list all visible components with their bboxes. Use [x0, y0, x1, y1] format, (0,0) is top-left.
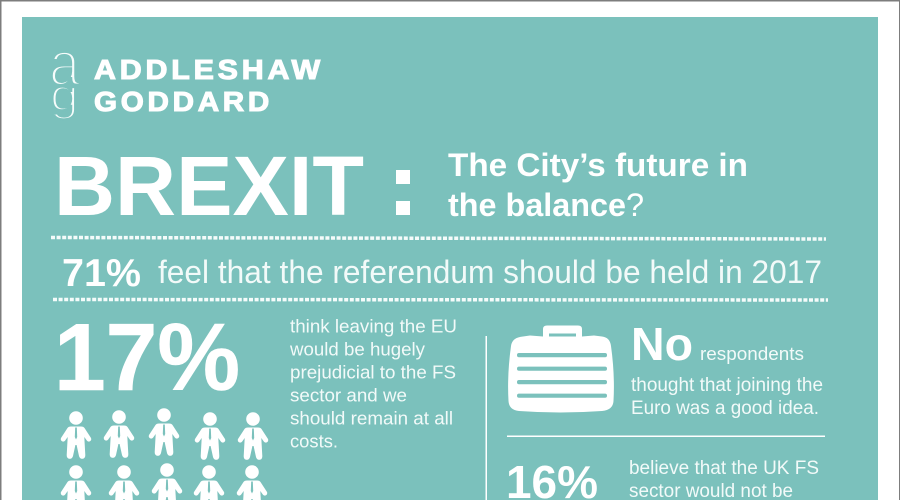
icon: ag monogram: g: [50, 70, 79, 120]
logo wordmark: ADDLESHAW: [94, 54, 324, 85]
logo wordmark: GODDARD: [94, 86, 273, 117]
title: BREXIT: BREXIT: [54, 139, 364, 233]
subtitle: ?: [626, 187, 644, 223]
logo wordmark: [94, 54, 324, 117]
subtitle: [448, 147, 748, 223]
statistic: no respondents: Euro was a good idea.: [631, 398, 819, 419]
text block: 17% description: would be hugely: [289, 338, 426, 360]
statistic: 17% heading: 17%: [54, 304, 240, 411]
text block: 17% description: [289, 316, 457, 452]
statistic: no respondents: [631, 318, 823, 419]
pictogram: people: [61, 408, 268, 500]
subtitle: The City’s future in: [448, 147, 748, 183]
logo: Addleshaw Goddard: [49, 30, 324, 120]
text block: 17% description: costs.: [290, 430, 338, 452]
icon: briefcase: [508, 326, 614, 412]
text block: 16% description: [629, 458, 819, 500]
text block: 17% description: sector and we: [290, 384, 407, 406]
statistic: 71% referendum in 2017: feel that the referendum should be held in 2017: [158, 254, 822, 290]
text block: 16% description: believe that the UK FS: [629, 458, 819, 479]
subtitle: the balance: [448, 187, 626, 223]
title colon: [396, 170, 410, 215]
statistic: no respondents: thought that joining the: [631, 375, 823, 396]
icon: ag monogram: a: [49, 30, 80, 99]
text block: 17% description: think leaving the EU: [290, 316, 457, 336]
statistic: 71% referendum in 2017: 71%: [62, 252, 141, 295]
statistic: no respondents: respondents: [700, 343, 804, 364]
text block: 17% description: should remain at all: [290, 408, 453, 428]
statistic: no respondents: No: [631, 318, 693, 370]
text block: 17% description: prejudicial to the FS: [290, 362, 456, 382]
